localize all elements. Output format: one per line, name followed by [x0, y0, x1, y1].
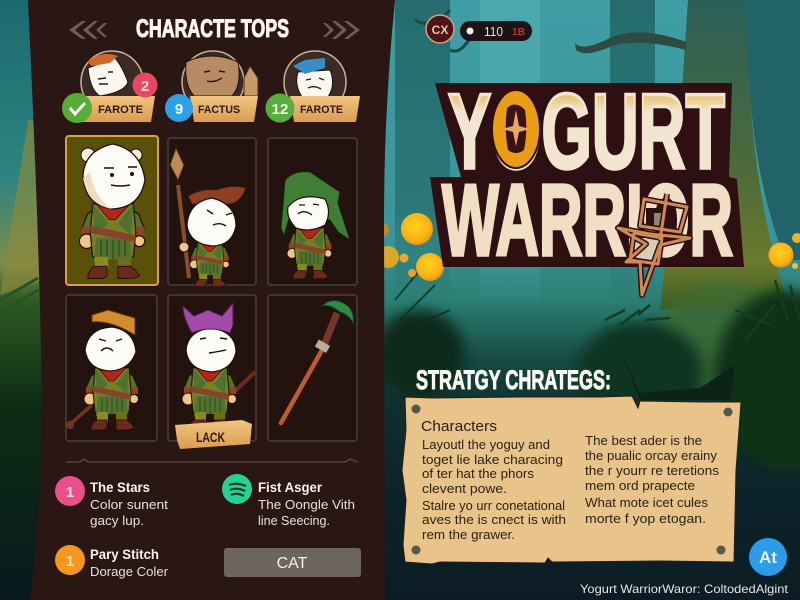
- legend: pary stitch: Dorage Coler: [90, 564, 169, 579]
- card: selected warrior: [66, 136, 158, 285]
- portrait: factus: 9: [175, 101, 183, 118]
- portrait: factus: FACTUS: [198, 104, 240, 116]
- legend: pary stitch: [55, 545, 169, 579]
- button: cat: [224, 548, 361, 577]
- badge: at: [749, 538, 787, 576]
- text: characters heading: Characters: [421, 419, 497, 435]
- text: right column: What mote icet cules: [585, 496, 708, 510]
- text: right column: the pualic orcay erainy: [585, 449, 718, 463]
- resource counter: 110: [484, 25, 503, 39]
- legend: pary stitch: Pary Stitch: [90, 546, 159, 562]
- divider: [66, 459, 358, 462]
- panel: character tops: [28, 0, 395, 600]
- legend: fist asger: The Oongle Vith: [258, 497, 355, 512]
- card: turban warrior: [268, 138, 357, 285]
- legend: fist asger: [222, 474, 355, 528]
- legend: the stars: [55, 476, 168, 528]
- portrait: farote one: 2: [141, 78, 149, 95]
- resource counter: [460, 21, 532, 41]
- panel: parchment: [402, 396, 741, 564]
- card: purple crown warrior: [168, 295, 256, 441]
- legend: fist asger: line Seecing.: [258, 513, 330, 528]
- legend: the stars: The Stars: [90, 479, 150, 495]
- text: right column: mem ord prapecte: [585, 479, 695, 493]
- text: right column: The best ader is the: [585, 434, 702, 448]
- portrait: factus: [165, 51, 258, 122]
- text: left column: aves the is cnect is with: [422, 513, 566, 527]
- legend: the stars: 1: [66, 484, 74, 501]
- logo: yogurt warrior: [430, 71, 744, 277]
- text: left column: Stalre yo urr conetational: [422, 499, 565, 513]
- emblem badge: [426, 15, 454, 43]
- text: right column: [585, 434, 719, 526]
- portrait: farote one: FAROTE: [98, 104, 143, 116]
- legend: pary stitch: 1: [66, 553, 74, 570]
- chevrons right: [323, 21, 360, 39]
- title: CHARACTE TOPS: [136, 15, 289, 43]
- portrait: farote two: [266, 51, 360, 122]
- label: lack: LACK: [196, 429, 225, 445]
- text: left column: [422, 438, 566, 542]
- portrait: farote two: 12: [272, 101, 288, 118]
- portrait: farote two: FAROTE: [300, 104, 343, 116]
- card: spear warrior: [168, 138, 256, 287]
- footer credit: Yogurt WarriorWaror: ColtodedAlgint: [580, 582, 789, 596]
- glowing orbs: [400, 213, 800, 281]
- emblem badge: CX: [432, 23, 448, 37]
- text: left column: toget lie lake characing: [422, 453, 563, 467]
- portrait: farote one: [62, 51, 158, 123]
- button: cat: CAT: [277, 555, 308, 572]
- card: crown warrior: [66, 295, 157, 441]
- text: left column: of ter hat the phors: [422, 467, 534, 481]
- legend: fist asger: Fist Asger: [258, 479, 323, 495]
- text: right column: morte f yop etogan.: [585, 512, 706, 526]
- chevrons left: [69, 21, 107, 39]
- text: left column: Layoutl the yoguy and: [422, 438, 550, 452]
- legend: the stars: gacy lup.: [90, 513, 144, 528]
- text: left column: clevent powe.: [422, 482, 507, 496]
- text: right column: the r yourr re teretions: [585, 464, 719, 478]
- heading: strategy: STRATGY CHRATEGS:: [416, 365, 611, 395]
- text: left column: rem the grawer.: [422, 528, 515, 542]
- resource counter: 1B: [512, 27, 525, 38]
- card: staff: [268, 295, 357, 441]
- logo shuriken emblem: [618, 194, 690, 295]
- label: lack: [175, 420, 252, 449]
- badge: at: At: [759, 548, 777, 567]
- legend: the stars: Color sunent: [90, 497, 168, 512]
